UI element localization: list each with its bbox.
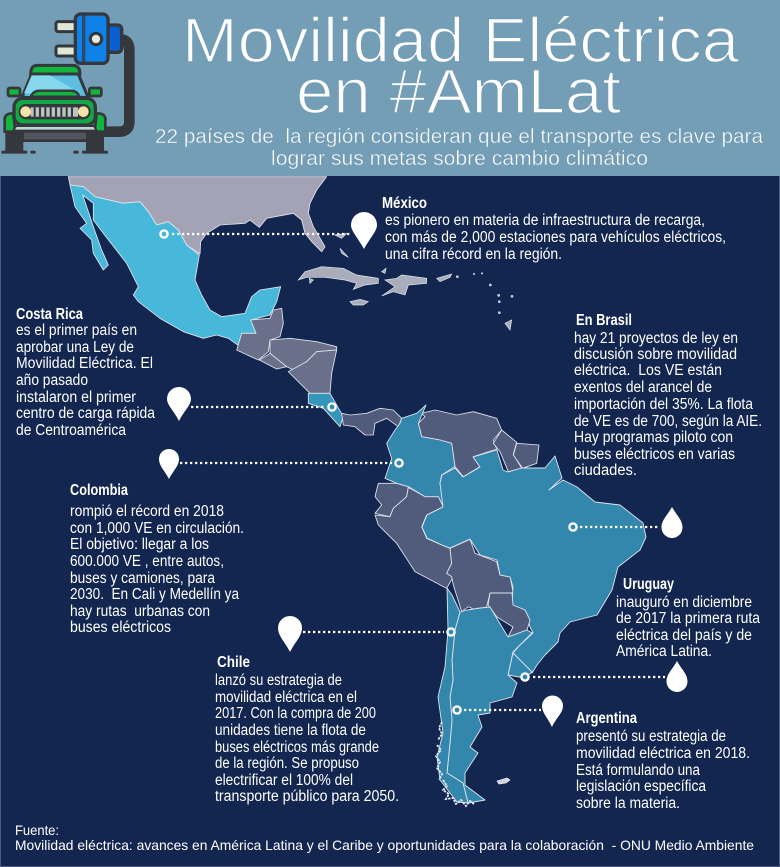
text block: En Brasil: importación del 35%. La flota — [574, 396, 753, 413]
title: en #AmLat — [296, 57, 622, 127]
text block: En Brasil: ciudades. — [574, 462, 637, 479]
text block: México — [382, 195, 726, 263]
text block: En Brasil: eléctrica. Los VE están — [574, 362, 722, 379]
text block: México: México — [382, 195, 427, 212]
subtitle — [155, 126, 764, 170]
text block: México: una cifra récord en la región. — [385, 246, 562, 263]
text block: Argentina: sobre la materia. — [576, 795, 680, 812]
text block: En Brasil: exentos del arancel de — [574, 379, 712, 396]
text block: En Brasil: buses eléctricos en varias — [574, 446, 735, 463]
location markers — [160, 230, 577, 714]
text block: En Brasil: hay 21 proyectos de ley en — [574, 330, 738, 347]
text block: Uruguay: inauguró en diciembre — [616, 594, 752, 611]
country: United States — [68, 177, 327, 254]
icon: electric car with plug — [1, 14, 129, 154]
text block: Colombia: 600.000 VE , entre autos, — [70, 553, 224, 570]
text block: En Brasil: En Brasil — [576, 312, 632, 329]
text block: Argentina: movilidad eléctrica en 2018. — [576, 745, 750, 762]
text block: Uruguay — [616, 576, 760, 660]
text block: Chile: Chile — [217, 654, 250, 671]
text block: En Brasil: discusión sobre movilidad — [574, 346, 737, 363]
text block: Argentina: legislación específica — [576, 778, 706, 795]
text block: Argentina: Argentina — [576, 710, 637, 727]
text block: Costa Rica — [16, 306, 155, 439]
text block: Colombia — [70, 482, 244, 636]
country: Costa Rica — [308, 393, 343, 427]
text block: México: es pionero en materia de infraestructura de recarga, — [385, 212, 705, 229]
text block: En Brasil: Hay programas piloto con — [574, 429, 733, 446]
text block: Colombia: rompió el récord en 2018 — [70, 503, 224, 520]
icon: pins pointing down — [159, 212, 563, 727]
title: Movilidad Eléctrica — [182, 6, 740, 76]
country: Argentina — [447, 607, 532, 803]
text block: Colombia: Colombia — [70, 482, 128, 499]
text block: En Brasil: de VE es de 700, según la AIE. — [574, 413, 762, 430]
text block: Colombia: buses eléctricos — [70, 619, 171, 636]
countries: Central America — [237, 308, 337, 393]
text block: Costa Rica: centro de carga rápida — [16, 405, 155, 422]
connector lines — [172, 234, 665, 710]
country: Brazil — [422, 450, 646, 673]
text block: Chile: lanzó su estrategia de — [215, 672, 342, 689]
text block: Chile: unidades tiene la flota de — [215, 722, 366, 739]
southern Chile fjords — [436, 722, 474, 806]
text block: Chile: transporte público para 2050. — [215, 788, 399, 805]
Falkland Islands — [497, 778, 510, 784]
text block: Costa Rica: Costa Rica — [16, 306, 83, 323]
text block: Chile: movilidad eléctrica en el — [215, 689, 357, 706]
text block: Colombia: El objetivo: llegar a los — [70, 536, 209, 553]
text block: Uruguay: de 2017 la primera ruta — [616, 610, 760, 627]
text block: Costa Rica: instalaron el primer — [16, 389, 136, 406]
source note: Movilidad eléctrica: avances en América Latina y el Caribe y oportunidades para la colaboración - ONU Medio Ambiente — [15, 837, 754, 853]
text block: Colombia: 2030. En Cali y Medellín ya — [70, 586, 239, 603]
text block: En Brasil — [574, 312, 762, 479]
text block: Argentina — [576, 710, 750, 812]
Caribbean islands — [298, 233, 513, 330]
country: Colombia — [385, 405, 455, 507]
text block: Chile: de la región. Se propuso — [215, 755, 359, 772]
text block: Chile: electrificar el 100% del — [215, 772, 353, 789]
text block: Colombia: con 1,000 VE en circulación. — [70, 520, 244, 537]
text block: Costa Rica: aprobar una Ley de — [16, 339, 134, 356]
text block: Chile: buses eléctricos más grande — [215, 739, 379, 756]
text block: Costa Rica: año pasado — [16, 372, 88, 389]
text block: Argentina: Está formulando una — [576, 762, 700, 779]
text block: Colombia: hay rutas urbanas con — [70, 603, 210, 620]
country: Paraguay — [488, 593, 530, 637]
source note: Fuente: — [15, 822, 59, 838]
title — [182, 6, 740, 127]
header band — [0, 0, 780, 176]
subtitle: 22 países de la región consideran que el transporte es clave para — [155, 126, 764, 148]
country: Mexico — [70, 185, 281, 347]
text block: Costa Rica: Movilidad Eléctrica. El — [16, 355, 153, 372]
text block: Chile — [215, 654, 399, 805]
text block: Costa Rica: es el primer país en — [16, 322, 137, 339]
text block: Costa Rica: de Centroamérica — [16, 422, 126, 439]
map of Latin America — [68, 177, 646, 806]
text block: Uruguay: Uruguay — [623, 576, 674, 593]
text block: México: con más de 2,000 estaciones para vehículos eléctricos, — [385, 229, 726, 246]
text block: Argentina: presentó su estrategia de — [576, 728, 726, 745]
country: Uruguay — [508, 653, 532, 678]
icon: drops pointing up — [662, 507, 688, 692]
source note — [15, 822, 754, 853]
text block: Uruguay: América Latina. — [616, 643, 712, 660]
countries: Panama, Venezuela, Guyana, Suriname, Ecuador, Peru, Bolivia — [342, 408, 539, 612]
text block: Colombia: buses y camiones, para — [70, 570, 215, 587]
country: Chile — [437, 588, 468, 803]
text block: Uruguay: eléctrica del país y de — [616, 627, 752, 644]
subtitle: lograr sus metas sobre cambio climático — [271, 148, 648, 170]
text block: Chile: 2017. Con la compra de 200 — [215, 705, 376, 722]
